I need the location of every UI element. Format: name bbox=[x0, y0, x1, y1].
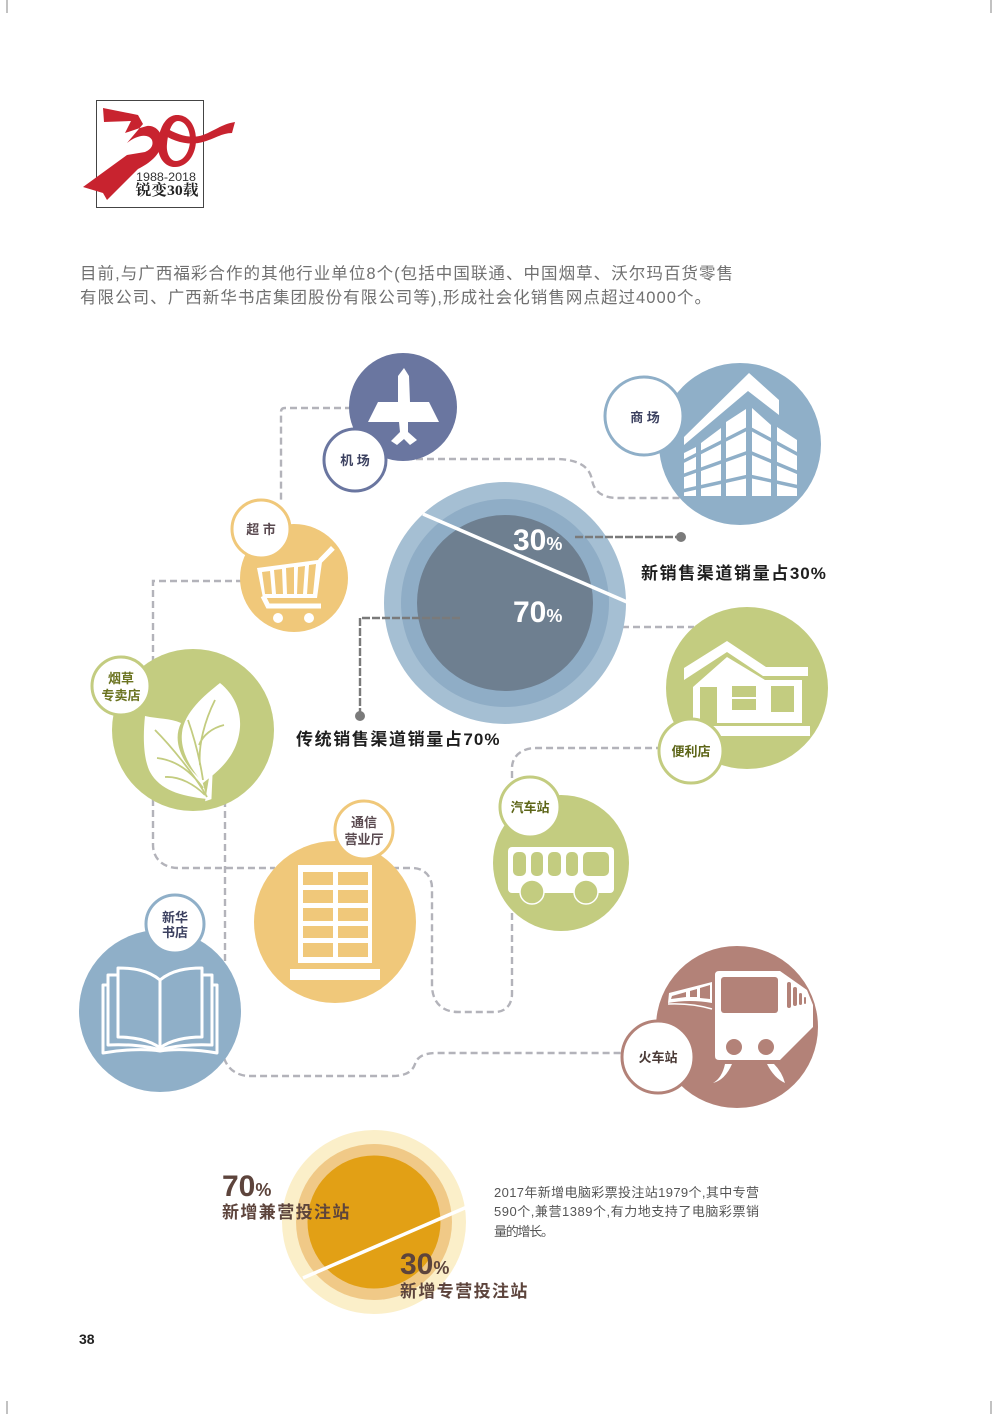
label: 30% dedicated stations: 30% bbox=[400, 1248, 449, 1281]
icon: house bbox=[684, 641, 810, 736]
intro text: 目前,与广西福彩合作的其他行业单位8个(包括中国联通、中国烟草、沃尔玛百货零售 bbox=[80, 264, 733, 283]
label: mall: 商 场 bbox=[630, 410, 660, 425]
logo: 30 anniversary ribbon: 1988-2018 bbox=[136, 172, 196, 184]
label: railway station: 火车站 bbox=[638, 1050, 678, 1065]
label: new channels 30%: 新销售渠道销量占30% bbox=[641, 563, 827, 583]
icon: cart bbox=[257, 546, 333, 623]
label: railway station bbox=[622, 1021, 694, 1093]
connector: 30% bbox=[575, 532, 686, 542]
label: airport bbox=[324, 429, 386, 491]
circle: bus station bbox=[493, 795, 629, 931]
label: 30% dedicated stations bbox=[400, 1248, 529, 1301]
label: convenience store bbox=[659, 719, 723, 783]
circle: mall bbox=[659, 363, 821, 525]
text block: 2017 stations: 2017年新增电脑彩票投注站1979个,其中专营 bbox=[494, 1185, 759, 1200]
label: airport: 机 场 bbox=[340, 453, 370, 468]
label: bookstore: 书店 bbox=[162, 925, 188, 940]
label: bus station: 汽车站 bbox=[510, 800, 550, 815]
label: telecom hall: 通信 bbox=[351, 815, 377, 830]
text block: 2017 stations: 量的增长。 bbox=[494, 1224, 554, 1239]
intro text: 有限公司、广西新华书店集团股份有限公司等),形成社会化销售网点超过4000个。 bbox=[80, 288, 711, 307]
bottom donut chart: new stations bbox=[282, 1130, 467, 1314]
circle: bookstore bbox=[79, 930, 241, 1092]
circle: telecom hall bbox=[254, 841, 416, 1003]
central donut chart: sales channels bbox=[384, 482, 627, 724]
icon: plane bbox=[368, 368, 439, 445]
label: tobacco shop bbox=[92, 657, 150, 715]
icon: bus bbox=[508, 847, 614, 904]
icon: open book bbox=[103, 968, 217, 1053]
circle: supermarket bbox=[240, 524, 348, 632]
label: telecom hall: 营业厅 bbox=[344, 832, 384, 847]
label: bookstore: 新华 bbox=[162, 910, 188, 925]
icon: train bbox=[668, 971, 813, 1083]
connector: 70% bbox=[355, 618, 460, 721]
label: 70% mixed stations bbox=[222, 1170, 351, 1222]
circle: convenience store bbox=[666, 607, 828, 769]
label: bookstore bbox=[146, 895, 204, 953]
label: tobacco shop: 专卖店 bbox=[101, 688, 141, 703]
label: 30% dedicated stations: 新增专营投注站 bbox=[400, 1281, 529, 1301]
label: 70% mixed stations: 新增兼营投注站 bbox=[222, 1202, 351, 1222]
value: 30%: 30% bbox=[513, 524, 562, 557]
icon: office block bbox=[290, 865, 380, 980]
dashed connectors bbox=[153, 408, 694, 1076]
label: supermarket: 超 市 bbox=[246, 522, 276, 537]
label: supermarket bbox=[232, 500, 290, 558]
icon: leaf bbox=[144, 683, 240, 799]
label: mall bbox=[605, 377, 683, 455]
intro text bbox=[80, 264, 733, 307]
text block: 2017 stations: 590个,兼营1389个,有力地支持了电脑彩票销 bbox=[494, 1204, 759, 1219]
label: 70% mixed stations: 70% bbox=[222, 1170, 271, 1203]
text block: 2017 stations bbox=[494, 1185, 759, 1239]
logo: 30 anniversary ribbon: 锐变30载 bbox=[136, 181, 200, 199]
circle: tobacco shop bbox=[112, 649, 274, 811]
label: traditional channels 70%: 传统销售渠道销量占70% bbox=[296, 729, 500, 749]
label: bus station bbox=[500, 777, 560, 837]
label: tobacco shop: 烟草 bbox=[108, 671, 134, 686]
logo: 30 anniversary ribbon bbox=[83, 100, 235, 208]
value: 70%: 70% bbox=[513, 596, 562, 629]
label: convenience store: 便利店 bbox=[671, 744, 711, 759]
label: telecom hall bbox=[335, 801, 393, 859]
circle: railway station bbox=[656, 946, 818, 1108]
page number: 38 bbox=[79, 1331, 95, 1347]
circle: airport bbox=[349, 353, 457, 461]
icon: mall building bbox=[682, 373, 799, 496]
